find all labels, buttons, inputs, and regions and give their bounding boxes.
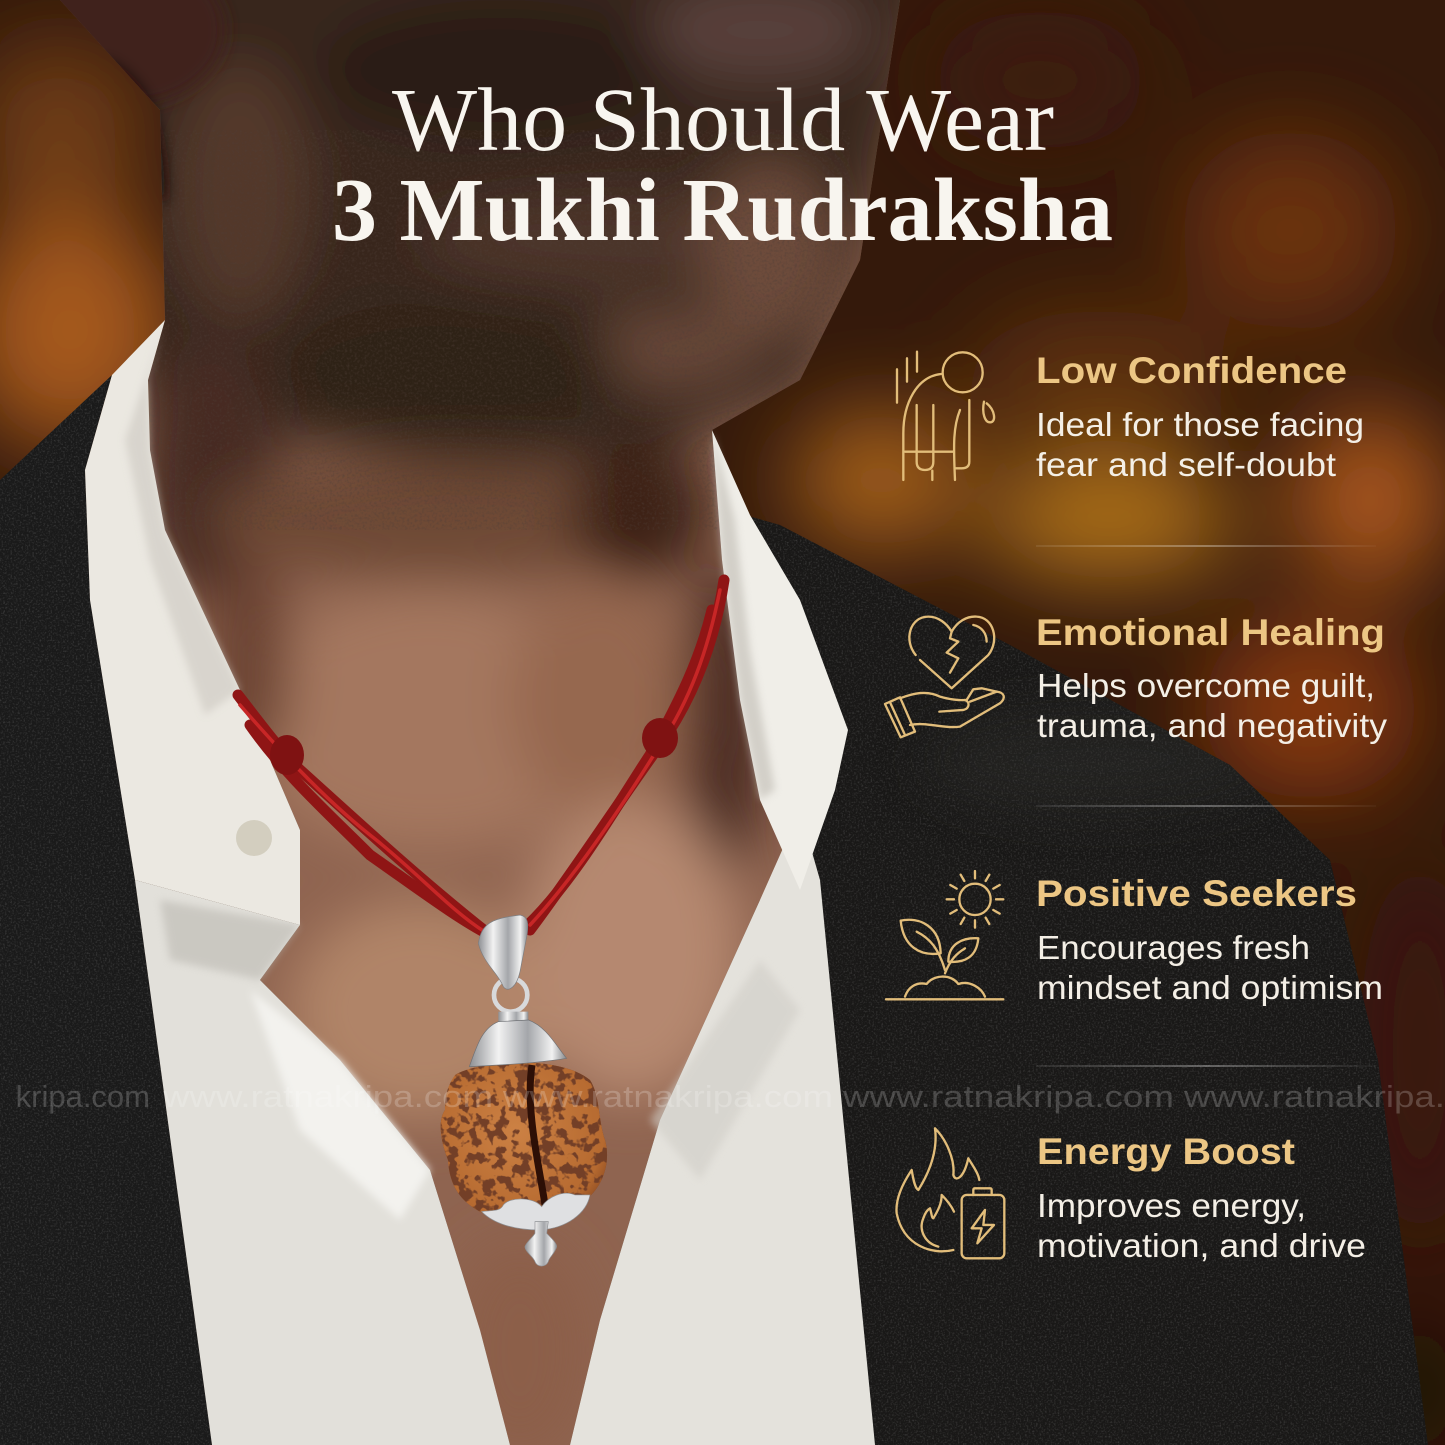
silver top cap (469, 1012, 567, 1067)
item: Emotional Healing (885, 612, 1388, 744)
icon: broken heart over hand (885, 617, 1004, 737)
description: Ideal for those facing (1036, 406, 1364, 443)
watermark: kripa.com (16, 1079, 150, 1114)
shirt: right side and collar (570, 430, 875, 1445)
description: Encourages fresh (1037, 929, 1310, 966)
heading: Emotional Healing (1036, 612, 1385, 653)
description: fear and self-doubt (1036, 446, 1336, 483)
icon: sun and seedling (886, 871, 1003, 999)
description (1037, 667, 1388, 744)
description (1037, 1187, 1366, 1264)
description: mindset and optimism (1037, 969, 1383, 1006)
jacket: right shoulder (730, 510, 1435, 1445)
description: motivation, and drive (1037, 1227, 1366, 1264)
watermark: www.ratnakripa.com (842, 1079, 1174, 1114)
icon: slumped person (897, 352, 994, 480)
red cord necklace (238, 580, 724, 935)
description (1036, 406, 1364, 483)
skin: face, neck and chest (60, 0, 900, 1445)
description: Helps overcome guilt, (1037, 667, 1375, 704)
watermark: www.ratnakripa.com (162, 1079, 493, 1114)
title (332, 71, 1113, 260)
description: Improves energy, (1037, 1187, 1306, 1224)
item: Positive Seekers (886, 871, 1383, 1006)
description (1037, 929, 1383, 1006)
watermark (16, 1079, 1445, 1114)
shirt: left side and collar (85, 320, 510, 1445)
watermark: www.ratnakripa.com (502, 1079, 833, 1114)
heading: Low Confidence (1036, 350, 1347, 391)
watermark: www.ratnakripa. (1183, 1079, 1445, 1114)
item: Low Confidence (897, 350, 1364, 483)
pendant bail and ring (478, 915, 528, 1012)
jacket: left lapel (0, 370, 220, 1445)
heading: Positive Seekers (1036, 873, 1357, 914)
icon: flame and battery (896, 1128, 1004, 1258)
title: 3 Mukhi Rudraksha (332, 161, 1113, 260)
rudraksha pendant (440, 914, 608, 1266)
title: Who Should Wear (392, 71, 1054, 170)
description: trauma, and negativity (1037, 707, 1388, 744)
rudraksha bead (440, 1062, 608, 1214)
silver petal base and drop (482, 1193, 590, 1266)
heading: Energy Boost (1037, 1131, 1295, 1172)
item: Energy Boost (896, 1128, 1366, 1264)
